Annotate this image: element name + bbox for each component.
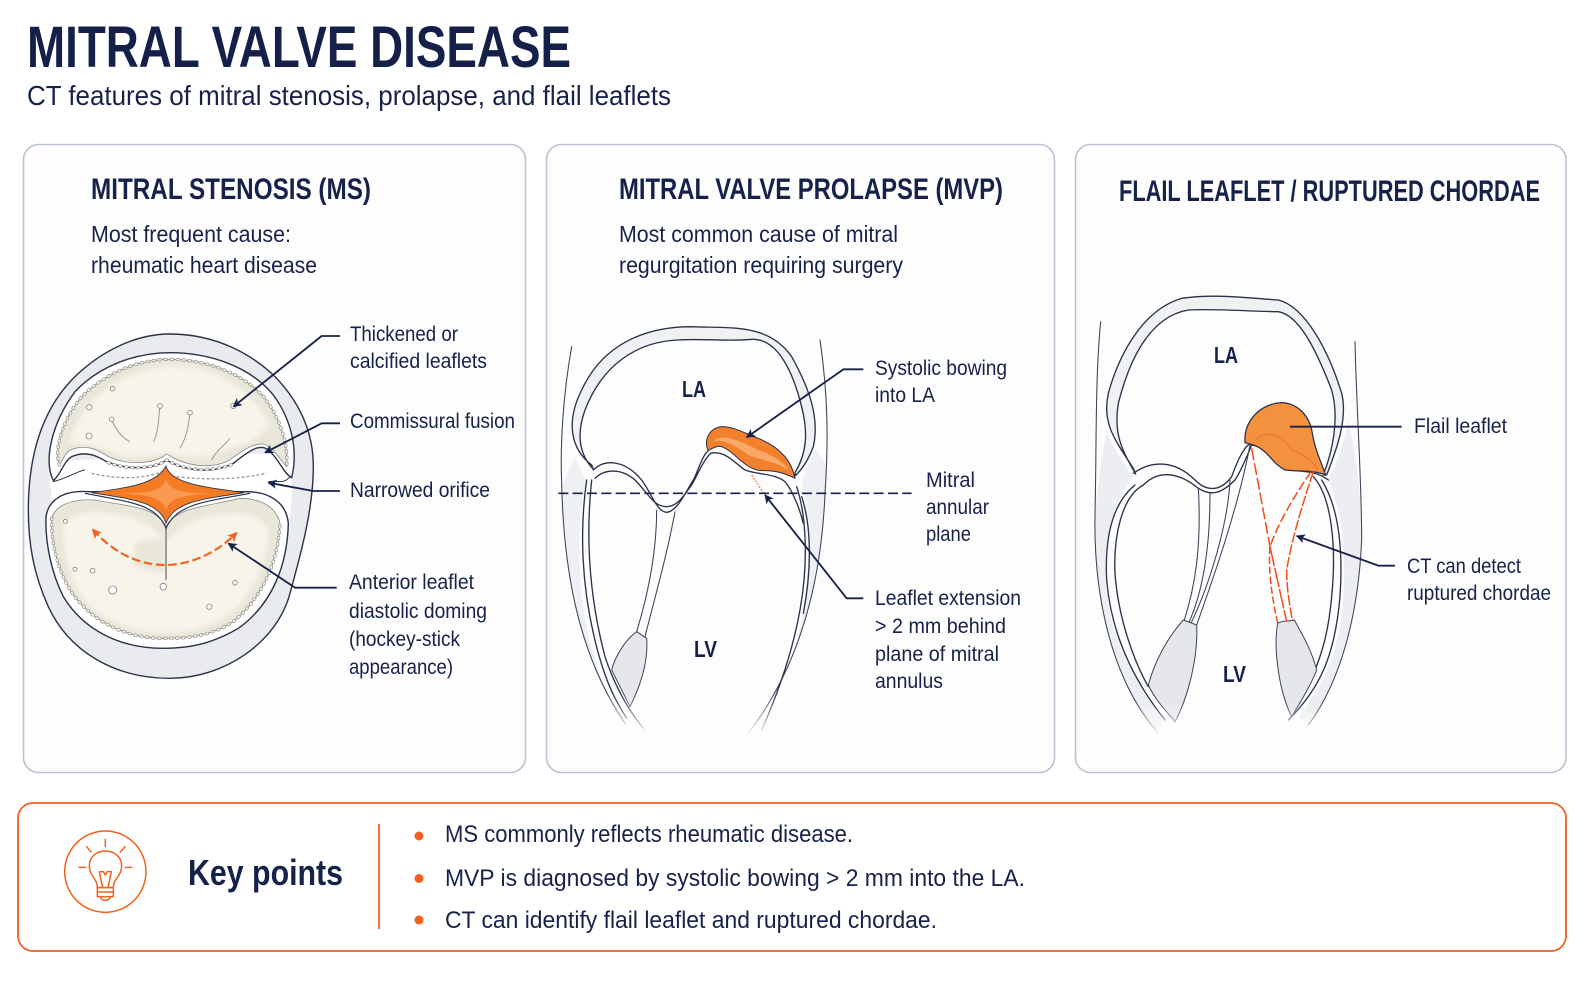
commissure bands (53, 470, 290, 482)
labels: stenosis callouts: calcified leaflets (350, 350, 487, 373)
doming arrow (93, 529, 237, 565)
description: stenosis cause: Most frequent cause: (91, 221, 291, 247)
orifice (92, 466, 244, 523)
description: prolapse significance: Most common cause of mitral (619, 221, 898, 247)
illustration: valve short-axis view (28, 334, 340, 678)
left ventricle walls (1106, 477, 1341, 720)
illustration: long-axis prolapse view (558, 327, 912, 737)
chamber labels: LA (1214, 342, 1238, 368)
labels: stenosis callouts: appearance) (349, 656, 453, 679)
title: MITRAL VALVE DISEASE (27, 15, 571, 80)
papillary muscles (1148, 620, 1317, 722)
outer myocardium bands (1095, 420, 1362, 733)
key points list: CT can identify flail leaflet and ruptured chordae. (445, 907, 937, 934)
labels: prolapse callouts: Systolic bowing (875, 357, 1007, 380)
heading: mitral stenosis: MITRAL STENOSIS (MS) (91, 173, 371, 206)
labels: prolapse callouts: plane of mitral (875, 643, 999, 666)
leader arrows (1290, 427, 1402, 566)
subtitle: CT features of mitral stenosis, prolapse, and flail leaflets (27, 80, 671, 111)
description: prolapse significance: regurgitation requiring surgery (619, 252, 903, 278)
chamber labels (682, 376, 718, 662)
chamber labels (1214, 342, 1247, 687)
bottom fade (1098, 703, 1352, 737)
labels: stenosis callouts: Thickened or (350, 323, 458, 346)
panel: key points (18, 803, 1566, 951)
key points list: MVP is diagnosed by systolic bowing > 2 mm into the LA. (445, 865, 1025, 892)
bottom fade (578, 693, 832, 737)
labels: stenosis callouts: Commissural fusion (350, 410, 515, 433)
left atrium wall (1107, 296, 1343, 475)
outer wall (28, 334, 313, 678)
labels: prolapse callouts: Mitral (926, 469, 975, 492)
description: prolapse significance (619, 221, 903, 278)
leader arrows (228, 336, 340, 588)
papillary muscle (612, 632, 647, 707)
left atrium wall (572, 327, 815, 476)
labels: prolapse callouts: annulus (875, 670, 943, 693)
labels: stenosis callouts (349, 323, 515, 679)
leader arrows (747, 369, 863, 598)
labels: stenosis callouts: Anterior leaflet (349, 571, 474, 594)
labels: prolapse callouts: plane (926, 523, 971, 546)
labels: prolapse callouts: Leaflet extension (875, 587, 1021, 610)
description: stenosis cause (91, 221, 317, 278)
heading: prolapse: MITRAL VALVE PROLAPSE (MVP) (619, 173, 1003, 206)
labels: flail callouts (1407, 415, 1551, 605)
extension marker (752, 475, 763, 493)
outer myocardium bands (562, 450, 826, 733)
labels: prolapse callouts: > 2 mm behind (875, 615, 1006, 638)
key points list: MS commonly reflects rheumatic disease. (445, 821, 853, 848)
panel: mitral stenosis (24, 144, 526, 772)
ruptured chordae (1252, 448, 1313, 623)
panel: flail leaflet (1076, 144, 1566, 772)
chordae to left papillary (1184, 445, 1250, 625)
mitral annular plane (558, 491, 912, 496)
prolapsing leaflet (706, 427, 795, 478)
chordae (637, 510, 675, 637)
illustration: long-axis flail view (1095, 296, 1402, 737)
lower leaflet (46, 491, 288, 648)
labels: prolapse callouts: annular (926, 496, 989, 519)
mitral leaflet curves (1133, 443, 1250, 488)
labels: flail callouts: CT can detect (1407, 555, 1521, 578)
panel: mitral valve prolapse (546, 144, 1054, 772)
labels: prolapse callouts: into LA (875, 384, 935, 407)
labels: stenosis callouts: diastolic doming (349, 600, 487, 623)
labels: stenosis callouts: (hockey-stick (349, 628, 460, 651)
description: stenosis cause: rheumatic heart disease (91, 252, 317, 278)
icon: light bulb (65, 831, 146, 912)
mitral leaflet curves (593, 451, 708, 512)
left ventricle walls (583, 480, 809, 730)
chamber labels: LV (1223, 661, 1247, 687)
chamber labels: LV (694, 636, 718, 662)
labels: flail callouts: ruptured chordae (1407, 582, 1551, 605)
labels: prolapse callouts (875, 357, 1021, 693)
key points list (414, 821, 1025, 934)
key points heading: Key points (188, 852, 343, 893)
labels: stenosis callouts: Narrowed orifice (350, 479, 490, 502)
central band (50, 453, 292, 523)
upper leaflet (49, 353, 294, 481)
labels: flail callouts: Flail leaflet (1414, 415, 1507, 438)
flail leaflet shape (1245, 403, 1326, 475)
chamber labels: LA (682, 376, 706, 402)
